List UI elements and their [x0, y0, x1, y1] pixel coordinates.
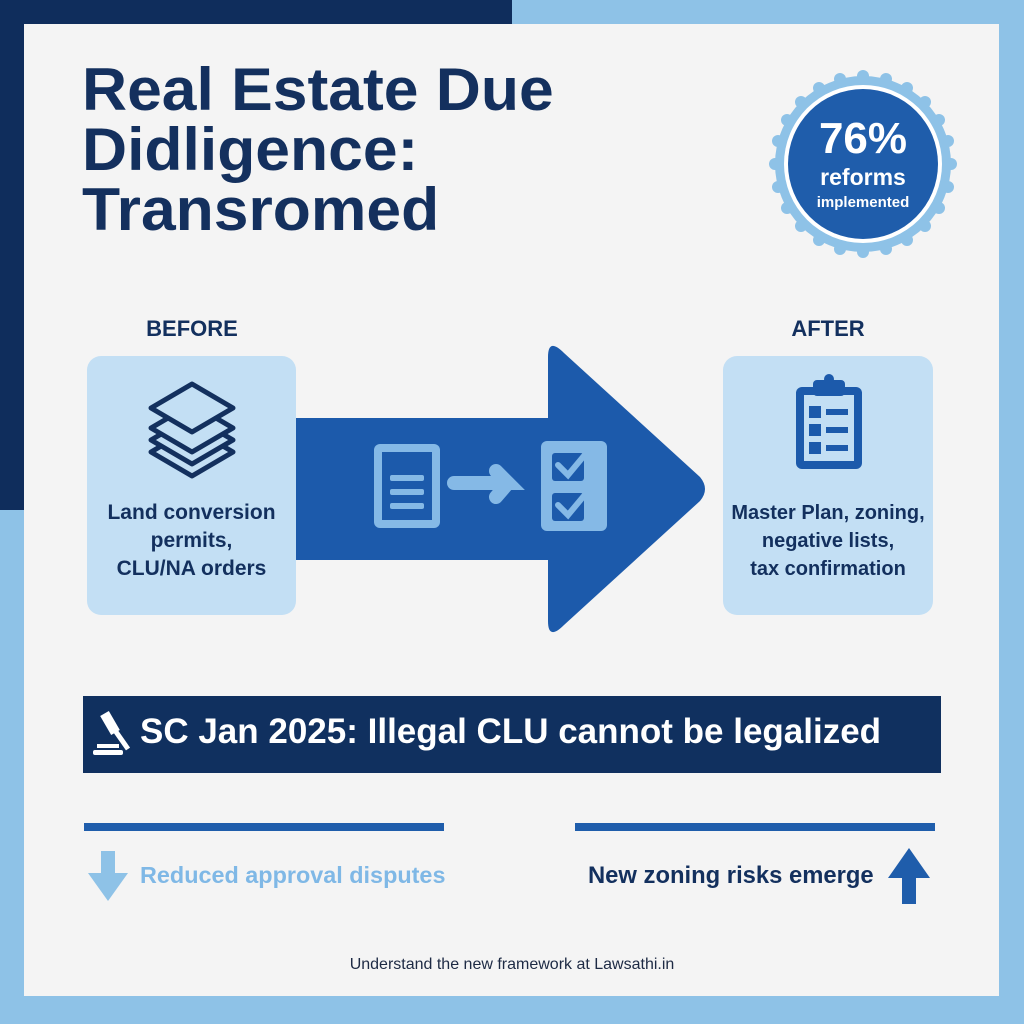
text: after: negative lists, — [762, 530, 894, 552]
icon: up arrow — [888, 848, 930, 904]
icon: gavel — [93, 711, 130, 755]
title — [82, 56, 554, 243]
icon: down arrow — [88, 851, 128, 901]
badge: 76% reforms implemented: reforms — [820, 164, 906, 190]
footer: Understand the new framework at Lawsathi.in — [350, 956, 674, 973]
icon: layers — [148, 382, 236, 478]
banner: SC ruling: SC Jan 2025: Illegal CLU cannot be legalized — [140, 712, 881, 751]
badge: 76% reforms implemented — [769, 70, 957, 258]
text: before: permits, — [151, 529, 232, 552]
text: before — [107, 501, 276, 580]
icon: document — [374, 444, 440, 528]
icon: small arrow — [454, 471, 508, 497]
text: new zoning risks: New zoning risks emerge — [588, 862, 874, 889]
heading: after: AFTER — [791, 316, 865, 341]
icon: clipboard — [796, 374, 862, 469]
title: Didligence: — [82, 116, 418, 183]
text: reduced approval disputes: Reduced approval disputes — [140, 862, 445, 888]
icon: checklist — [541, 441, 607, 531]
badge: 76% reforms implemented: implemented — [817, 194, 909, 211]
banner: SC ruling — [83, 696, 941, 773]
text: before: CLU/NA orders — [117, 557, 266, 580]
panel: before — [87, 356, 296, 615]
text: before: Land conversion — [107, 501, 276, 524]
panel: after — [723, 356, 933, 615]
title: Real Estate Due — [82, 56, 554, 123]
text: after: tax confirmation — [750, 558, 906, 580]
text: after: Master Plan, zoning, — [731, 502, 925, 524]
arrow: transformation — [296, 346, 705, 632]
text: after — [731, 502, 925, 580]
badge: 76% reforms implemented: 76% — [819, 114, 907, 163]
title: Transromed — [82, 176, 439, 243]
heading: before: BEFORE — [146, 316, 238, 341]
